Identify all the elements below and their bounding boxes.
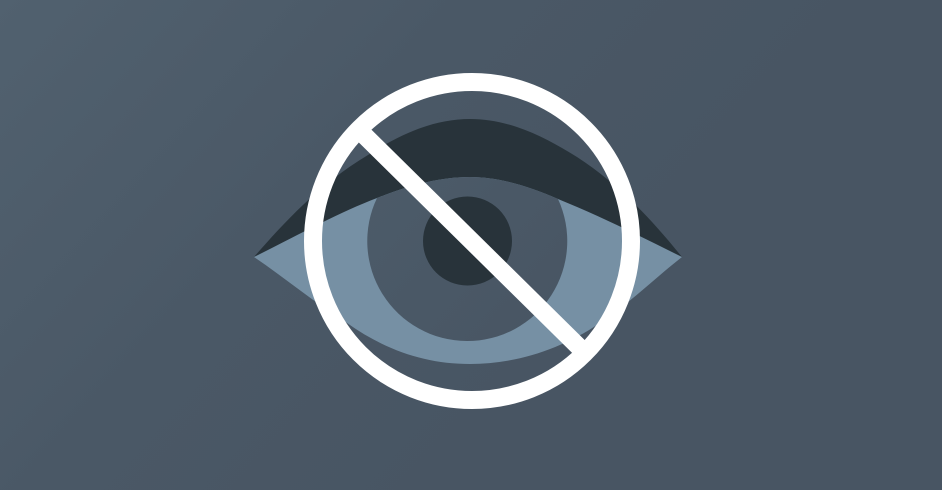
icon: upper eyelid (254, 119, 682, 257)
icon: pupil (423, 196, 512, 286)
prohibition ring (313, 82, 631, 400)
icon: iris (367, 177, 567, 341)
icon: prohibition sign (313, 82, 631, 400)
icon: eye white (254, 177, 682, 364)
prohibition slash (362, 133, 582, 350)
